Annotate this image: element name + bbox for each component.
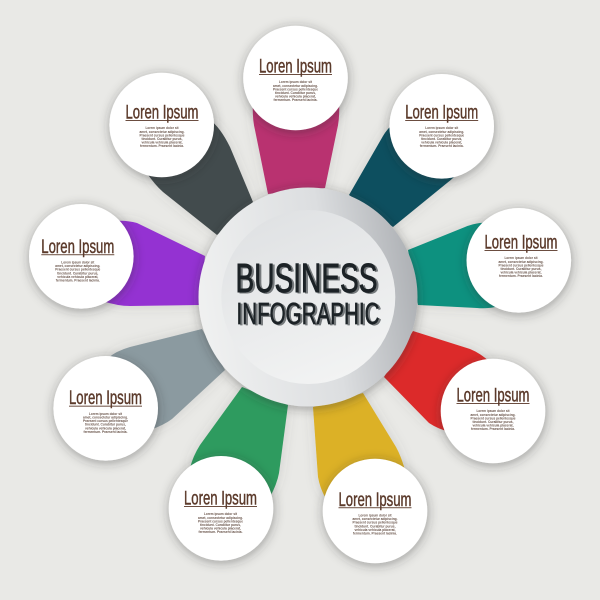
node: green [169,456,273,561]
node: dark teal [389,74,494,179]
node: dark teal: amet, consectetur adipiscing. [419,130,464,134]
node: yellow: Lorem ipsum dolor sit [358,513,392,517]
node: green: tincidunt. Curabitur purus, [200,523,241,527]
node: purple: amet, consectetur adipiscing. [55,264,100,268]
node: magenta [243,26,348,130]
node: grey [53,356,158,461]
node: red: fermentum. Praesent lacinia. [471,427,515,431]
node: purple: Loren Ipsum [41,237,114,258]
node: purple: tincidunt. Curabitur purus, [57,271,98,275]
node: green: amet, consectetur adipiscing. [198,516,243,520]
petal: green [190,387,288,497]
node: magenta: Praesent cursus pellentesque [273,87,318,91]
petal: magenta [253,100,339,194]
node: dark teal: vehicula vehicula placerat, [421,141,462,145]
node: grey: Praesent cursus pellentesque [83,419,128,423]
central hub [198,188,418,406]
node: magenta: Loren Ipsum [259,56,332,78]
heading [236,255,380,331]
node: teal: vehicula vehicula placerat, [500,271,542,275]
node: green: vehicula vehicula placerat, [200,527,241,531]
node: purple [29,204,134,309]
node: magenta: fermentum. Praesent lacinia. [274,98,318,102]
node: dark teal: tincidunt. Curabitur purus, [421,137,462,141]
node: dark grey: Praesent cursus pellentesque [140,133,184,137]
node: yellow: Loren Ipsum [338,490,412,511]
petal: purple [102,221,205,306]
node: teal: fermentum. Praesent lacinia. [499,274,543,278]
node: teal [466,208,571,313]
node: teal: Praesent cursus pellentesque [498,263,544,267]
node: red: tincidunt. Curabitur purus, [472,420,514,424]
petal: grey [108,329,225,430]
node: teal: Lorem ipsum dolor sit [504,256,538,260]
node: green: fermentum. Praesent lacinia. [198,530,242,534]
node: red: Lorem ipsum dolor sit [476,409,510,413]
petal: dark teal [349,122,458,227]
node: yellow: amet, consectetur adipiscing. [352,517,398,521]
node: dark teal: Praesent cursus pellentesque [419,133,464,137]
node: dark teal: Loren Ipsum [405,102,478,124]
node: dark grey: tincidunt. Curabitur purus, [142,137,182,141]
node: green: Loren Ipsum [184,488,257,510]
node: grey: tincidunt. Curabitur purus, [85,423,126,427]
node: dark grey: vehicula vehicula placerat, [142,141,182,145]
node: dark grey: amet, consectetur adipiscing. [140,130,184,134]
node: yellow: vehicula vehicula placerat, [354,528,396,532]
node: teal: Loren Ipsum [484,232,558,254]
node: green: Lorem ipsum dolor sit [204,512,238,516]
node: red: Loren Ipsum [456,386,530,406]
node: purple: vehicula vehicula placerat, [57,275,98,279]
node: dark teal: fermentum. Praesent lacinia. [420,144,464,148]
node: red: Praesent cursus pellentesque [470,416,516,420]
node: teal: tincidunt. Curabitur purus, [500,267,542,271]
node: purple: fermentum. Praesent lacinia. [56,279,100,283]
node: green: Praesent cursus pellentesque [198,519,243,523]
node: red: amet, consectetur adipiscing. [470,413,516,417]
node: dark grey: fermentum. Praesent lacinia. [140,144,184,148]
node: grey: vehicula vehicula placerat, [85,426,126,430]
node: yellow: tincidunt. Curabitur purus, [354,524,396,528]
node: magenta: amet, consectetur adipiscing. [273,84,318,88]
node: magenta: tincidunt. Curabitur purus, [275,91,316,95]
node: yellow: Praesent cursus pellentesque [352,521,398,525]
heading: INFOGRAPHIC [236,297,380,331]
node: magenta: vehicula vehicula placerat, [275,95,316,99]
node: dark grey: Loren Ipsum [126,102,198,124]
node: dark grey: Lorem ipsum dolor sit [146,126,179,130]
node: purple: Lorem ipsum dolor sit [61,261,95,265]
node: grey: fermentum. Praesent lacinia. [84,430,128,434]
node: red [441,359,545,463]
node: red: vehicula vehicula placerat, [472,424,514,428]
node: grey: Loren Ipsum [69,388,142,409]
node: purple: Praesent cursus pellentesque [55,268,100,272]
petal: teal [408,222,500,308]
petal: yellow [313,393,405,497]
node: dark grey [109,73,214,177]
node: yellow: fermentum. Praesent lacinia. [353,531,397,535]
petal: red [384,331,490,432]
node: grey: amet, consectetur adipiscing. [83,416,128,420]
node: magenta: Lorem ipsum dolor sit [279,80,313,84]
node: teal: amet, consectetur adipiscing. [498,260,544,264]
node: dark teal: Lorem ipsum dolor sit [425,126,459,130]
node: yellow [323,459,427,563]
petal: dark grey [146,120,253,235]
heading: BUSINESS [236,255,378,301]
node: grey: Lorem ipsum dolor sit [89,412,123,416]
